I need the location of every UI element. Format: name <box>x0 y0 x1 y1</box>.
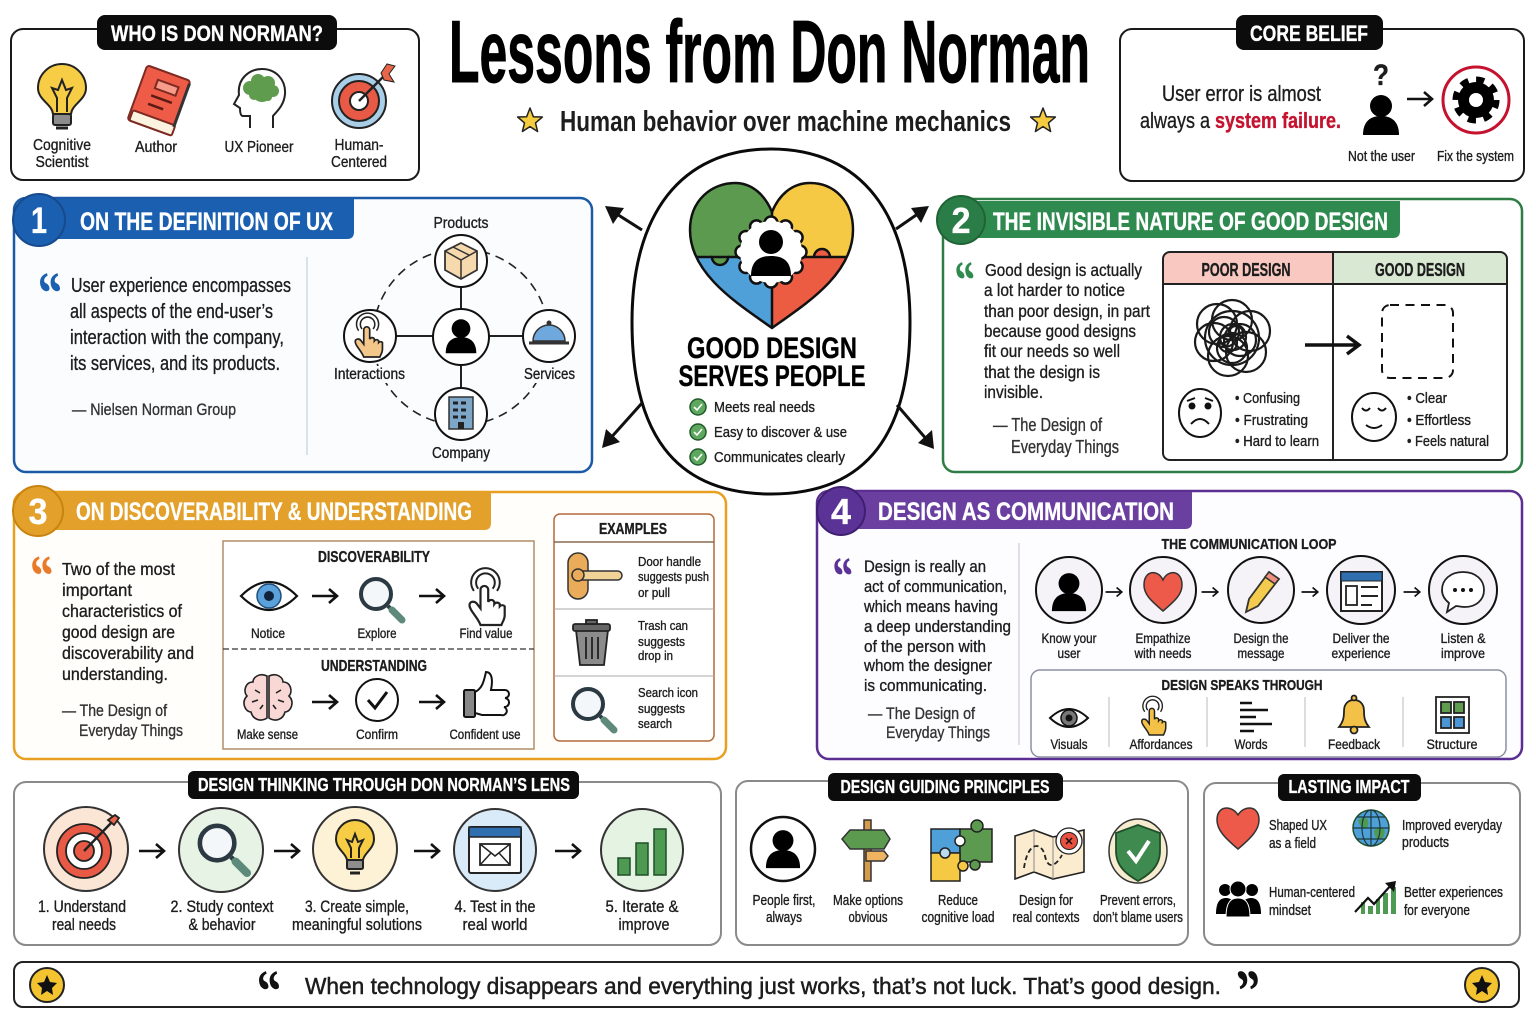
principle: reduce cognitive load: Reduce <box>938 893 978 909</box>
quote text: which means having <box>863 597 998 616</box>
quote text: important <box>62 580 132 600</box>
step: design the message: Design the <box>1234 631 1288 646</box>
impact: better experiences: Better experiences <box>1404 885 1503 901</box>
label: structure: Structure <box>1426 737 1478 752</box>
header: invisible nature: 2 <box>952 200 970 241</box>
step: design the message: message <box>1238 646 1284 661</box>
icon: trash can <box>573 620 610 665</box>
core belief statement: always a system failure. <box>1140 108 1341 133</box>
heading tag: design thinking <box>188 771 579 799</box>
box: design speaks through <box>1031 670 1506 757</box>
examples box <box>554 514 714 741</box>
step: empathize: Empathize <box>1136 631 1190 646</box>
heading: good design serves people: SERVES PEOPLE <box>678 360 866 393</box>
label: visuals: Visuals <box>1050 737 1088 752</box>
label: feedback: Feedback <box>1328 737 1380 752</box>
principle: reduce cognitive load: cognitive load <box>922 910 994 926</box>
step 5: iterate and improve <box>601 809 683 934</box>
header: design as communication: DESIGN AS COMMUNICATION <box>878 498 1174 526</box>
list: poor design traits: • Frustrating <box>1235 413 1308 429</box>
text: search icon <box>638 685 698 731</box>
principle: make options obvious: obvious <box>848 910 888 926</box>
impact: improved products <box>1353 810 1503 851</box>
arrow <box>312 589 337 603</box>
quote text: Two of the most <box>62 559 175 579</box>
heading tag: design guiding principles: DESIGN GUIDING PRINCIPLES <box>840 776 1050 797</box>
impact: better experiences: for everyone <box>1404 903 1470 919</box>
bottom quote bar <box>14 958 1519 1024</box>
principle: prevent errors: Prevent errors, <box>1100 893 1176 909</box>
quote text <box>24 543 194 684</box>
icon: target with arrow <box>332 64 395 128</box>
icon: gear with person <box>736 216 806 288</box>
label: find value: Find value <box>460 626 512 641</box>
quote attribution <box>868 704 990 742</box>
icon: gear in red circle <box>1443 67 1509 133</box>
step: know your user: Know your <box>1042 631 1097 646</box>
checklist <box>690 399 847 466</box>
principle: design for real contexts: Design for <box>1019 893 1073 909</box>
checklist: Communicates clearly <box>714 449 845 466</box>
heading tag: design thinking: DESIGN THINKING THROUGH DON NORMAN’S LENS <box>198 774 570 795</box>
icon: star coin right <box>1465 968 1499 1002</box>
core belief statement <box>1140 81 1341 133</box>
quote text: User experience encompasses <box>71 275 291 297</box>
icon: pointing hand <box>470 568 505 625</box>
text: trash can: drop in <box>638 648 673 663</box>
quote text: than poor design, in part <box>984 301 1150 321</box>
quote text: “ <box>24 543 63 608</box>
panel 1: definition of UX <box>13 194 592 472</box>
principle: make options obvious: Make options <box>833 893 903 909</box>
step: design the message <box>1228 557 1294 661</box>
step: empathize <box>1130 557 1196 661</box>
label: confirm: Confirm <box>356 727 398 742</box>
principle: design for real contexts <box>1012 828 1084 926</box>
quote attribution: Everyday Things <box>1011 437 1119 457</box>
step: know your user: user <box>1058 646 1081 661</box>
label: author: Author <box>135 139 178 156</box>
panel: design guiding principles <box>736 773 1188 945</box>
arrow <box>419 589 444 603</box>
list: poor design traits: • Hard to learn <box>1235 434 1319 450</box>
icon: words lines <box>1240 703 1272 731</box>
node: services <box>523 310 575 362</box>
icon: head with brain <box>234 69 285 128</box>
heading tag: lasting impact <box>1278 774 1421 801</box>
icon: puzzle heart <box>688 182 854 330</box>
heading: discoverability: DISCOVERABILITY <box>318 549 431 566</box>
label: cognitive scientist: Cognitive <box>33 137 91 154</box>
header: design as communication: 4 <box>831 491 851 532</box>
text: door handle: Door handle <box>638 554 701 569</box>
panel: core belief <box>1120 15 1524 181</box>
quote attribution: — The Design of <box>993 415 1103 435</box>
quote text: Design is really an <box>864 557 986 576</box>
arrow <box>1302 587 1318 597</box>
step: deliver the experience: experience <box>1332 646 1390 661</box>
label: not the user: Not the user <box>1348 149 1415 165</box>
impact: human-centered mindset: mindset <box>1269 903 1311 919</box>
text: search icon: Search icon <box>638 685 698 700</box>
step 1: understand real needs: 1. Understand <box>38 898 126 916</box>
step: deliver the experience <box>1327 556 1395 661</box>
text: trash can: Trash can <box>638 618 688 633</box>
label: human-centered: Centered <box>331 154 387 171</box>
quote attribution: Everyday Things <box>79 721 183 740</box>
quote text: “ <box>32 260 72 326</box>
principle: prevent errors: don’t blame users <box>1093 910 1183 926</box>
label: fix the system: Fix the system <box>1437 149 1514 165</box>
icon: sad face <box>1179 389 1221 437</box>
principle: prevent errors <box>1093 819 1183 926</box>
impact: shaped UX: as a field <box>1269 836 1316 852</box>
list: poor design traits: • Confusing <box>1235 391 1300 407</box>
impact: shaped UX <box>1217 808 1327 852</box>
icon: tangled scribble <box>1195 300 1270 376</box>
quote text <box>827 546 1011 695</box>
header: discoverability and understanding <box>13 486 491 536</box>
checklist: Easy to discover & use <box>714 424 847 441</box>
icon: search magnifier <box>573 689 614 730</box>
step 5: iterate and improve: 5. Iterate & <box>606 898 678 916</box>
icon: feedback bell <box>1339 696 1369 734</box>
quote text <box>949 250 1150 402</box>
step: listen and improve <box>1429 556 1497 661</box>
icon: thumbs up <box>464 672 509 717</box>
step 1: understand real needs: real needs <box>52 916 116 934</box>
quote text: because good designs <box>984 321 1136 341</box>
quote text: “ <box>827 546 862 606</box>
step 1: understand real needs <box>38 807 128 934</box>
quote text: its services, and its products. <box>70 353 280 375</box>
icon: visuals eye <box>1050 709 1088 727</box>
step 2: study context <box>170 808 274 934</box>
arrow: to panel 4 <box>897 405 934 449</box>
quote text: discoverability and <box>62 643 194 663</box>
step 3: create simple solutions <box>292 807 422 934</box>
step 2: study context: 2. Study context <box>170 898 274 916</box>
list: poor design traits <box>1235 391 1319 450</box>
center emblem: good design serves people <box>632 149 910 494</box>
impact: improved products: Improved everyday <box>1402 818 1503 834</box>
icon: book <box>127 65 191 136</box>
label: company: Company <box>432 445 490 462</box>
step 4: test in the real world: real world <box>462 916 528 934</box>
label: services: Services <box>524 366 575 383</box>
step: listen and improve: improve <box>1441 646 1485 661</box>
label: words: Words <box>1234 737 1268 752</box>
node: user <box>433 309 489 365</box>
heading tag: lasting impact: LASTING IMPACT <box>1288 776 1410 797</box>
quote attribution: — The Design of <box>868 704 975 723</box>
text: door handle: suggests push <box>638 569 709 584</box>
step: know your user <box>1036 557 1102 661</box>
quote attribution <box>993 415 1119 457</box>
panel 3: discoverability and understanding <box>13 486 726 759</box>
impact: shaped UX: Shaped UX <box>1269 818 1327 834</box>
quote text: characteristics of <box>62 601 182 621</box>
text: trash can: suggests <box>638 634 685 649</box>
heading tag: who is Don Norman: WHO IS DON NORMAN? <box>111 21 323 46</box>
heading tag: design guiding principles <box>828 773 1063 801</box>
panel: who is Don Norman <box>11 15 419 180</box>
quote text: invisible. <box>984 382 1043 402</box>
heading: examples: EXAMPLES <box>599 521 667 538</box>
quote text: fit our needs so well <box>984 341 1120 361</box>
icon: check circle <box>356 679 398 721</box>
arrow <box>555 844 580 858</box>
heading tag: who is Don Norman <box>97 15 337 50</box>
quote attribution: — The Design of <box>62 701 167 720</box>
heading: poor design: POOR DESIGN <box>1202 260 1290 280</box>
heading: good design: GOOD DESIGN <box>1375 260 1465 280</box>
quote text: of the person with <box>864 637 986 656</box>
quote attribution: — Nielsen Norman Group <box>72 400 236 419</box>
principle: people first: People first, <box>752 893 816 909</box>
comparison table: poor vs good design <box>1163 252 1507 460</box>
flow box: discoverability and understanding <box>223 541 534 749</box>
step 5: iterate and improve: improve <box>618 916 670 934</box>
quote attribution <box>62 701 183 740</box>
label: explore: Explore <box>358 626 396 641</box>
panel 4: design as communication <box>817 487 1522 759</box>
list: good design traits <box>1407 391 1489 450</box>
arrow: to panel 2 <box>896 206 929 229</box>
quote text <box>32 260 291 375</box>
core belief statement: User error is almost <box>1162 81 1321 106</box>
quote text: a lot harder to notice <box>984 280 1125 300</box>
icon: confused user <box>1363 59 1399 135</box>
arrow: to panel 3 <box>602 403 642 448</box>
text: search icon: search <box>638 716 672 731</box>
text: door handle: or pull <box>638 585 670 600</box>
label: human-centered <box>331 137 387 171</box>
quote text: interaction with the company, <box>70 327 284 349</box>
step: listen and improve: Listen & <box>1440 631 1486 646</box>
impact: better experiences <box>1355 881 1503 919</box>
arrow <box>1404 587 1420 597</box>
principle: design for real contexts: real contexts <box>1012 910 1080 926</box>
label: notice: Notice <box>251 626 285 641</box>
quote text: a deep understanding <box>864 617 1011 636</box>
arrow <box>139 844 164 858</box>
arrow: to panel 1 <box>605 206 642 230</box>
principle: people first <box>751 817 816 926</box>
text: door handle <box>638 554 709 600</box>
label: products: Products <box>434 215 489 232</box>
header: on the definition of UX: ON THE DEFINITION OF UX <box>80 208 333 236</box>
UX diagram: hub and spokes <box>332 215 577 462</box>
node: products <box>435 235 487 287</box>
icon: door handle <box>568 553 622 599</box>
panel 2: invisible nature of good design <box>937 196 1522 472</box>
step: deliver the experience: Deliver the <box>1332 631 1390 646</box>
heading: good design serves people <box>678 332 866 393</box>
header: design as communication <box>817 487 1192 535</box>
label: human-centered: Human- <box>334 137 384 154</box>
principle: people first: always <box>766 910 802 926</box>
arrow <box>312 695 337 709</box>
header: on the definition of UX: 1 <box>31 200 47 241</box>
panel: lasting impact <box>1204 774 1520 945</box>
label: confident use: Confident use <box>450 727 520 742</box>
label: interactions: Interactions <box>334 366 405 383</box>
impact: improved products: products <box>1402 835 1449 851</box>
heading: understanding: UNDERSTANDING <box>321 658 427 675</box>
quote text: understanding. <box>62 664 168 684</box>
heading tag: core belief: CORE BELIEF <box>1250 21 1368 46</box>
heading: design speaks through: DESIGN SPEAKS THROUGH <box>1162 677 1322 694</box>
list: good design traits: • Feels natural <box>1407 434 1489 450</box>
icon: brain <box>244 675 292 720</box>
quote text: whom the designer <box>863 656 992 675</box>
label: cognitive scientist <box>33 137 91 171</box>
quote text: is communicating. <box>864 676 987 695</box>
header: on the definition of UX <box>13 194 354 246</box>
quote text: act of communication, <box>864 577 1007 596</box>
icon: dashed invisible square <box>1382 305 1453 378</box>
quote text: that the design is <box>984 362 1100 382</box>
step 2: study context: & behavior <box>188 916 256 934</box>
list: good design traits: • Effortless <box>1407 413 1471 429</box>
icon: lightbulb <box>38 64 86 128</box>
icon: happy face <box>1352 393 1396 441</box>
step 4: test in the real world: 4. Test in the <box>454 898 536 916</box>
node: company <box>435 388 487 440</box>
panel: design thinking <box>14 771 721 945</box>
step 4: test in the real world <box>454 809 536 934</box>
checklist: Meets real needs <box>714 399 815 416</box>
arrow <box>419 695 444 709</box>
text: trash can <box>638 618 688 663</box>
icon: structure grid <box>1436 697 1469 733</box>
step 3: create simple solutions: meaningful solutions <box>292 916 422 934</box>
icon: star coin left <box>30 968 64 1002</box>
label: make sense: Make sense <box>237 727 298 742</box>
quote text: all aspects of the end-user’s <box>70 301 273 323</box>
header: discoverability and understanding: 3 <box>28 491 48 532</box>
icon: magnifier <box>361 579 402 620</box>
quote mark open: “ <box>251 958 291 1024</box>
icon: affordances hand <box>1142 696 1166 735</box>
quote text: Good design is actually <box>985 260 1142 280</box>
arrow <box>414 844 439 858</box>
arrow <box>1106 587 1122 597</box>
impact: human-centered mindset: Human-centered <box>1269 885 1355 901</box>
header: discoverability and understanding: ON DISCOVERABILITY & UNDERSTANDING <box>76 498 472 526</box>
node: interactions <box>344 310 396 362</box>
quote mark close: ” <box>1231 958 1271 1024</box>
closing quote text: When technology disappears and everything just works, that’s not luck. That’s good design. <box>305 973 1221 999</box>
impact: human-centered mindset <box>1216 881 1355 919</box>
heading: communication loop: THE COMMUNICATION LOOP <box>1162 536 1336 553</box>
arrow <box>274 844 299 858</box>
step 3: create simple solutions: 3. Create simple, <box>305 898 409 916</box>
arrow <box>1202 587 1218 597</box>
label: cognitive scientist: Scientist <box>36 154 89 171</box>
step: empathize: with needs <box>1134 646 1192 661</box>
icon: eye <box>241 582 297 610</box>
list: good design traits: • Clear <box>1407 391 1447 407</box>
principle: make options obvious <box>833 820 903 926</box>
label: UX pioneer: UX Pioneer <box>224 139 294 156</box>
label: affordances: Affordances <box>1130 737 1193 752</box>
icon: confused user: ? <box>1373 59 1389 92</box>
header: invisible nature <box>937 196 1400 244</box>
text: search icon: suggests <box>638 701 685 716</box>
quote text: “ <box>949 250 984 310</box>
header: invisible nature: THE INVISIBLE NATURE OF GOOD DESIGN <box>993 208 1388 236</box>
heading tag: core belief <box>1236 15 1383 50</box>
quote attribution: Everyday Things <box>886 723 990 742</box>
arrow: poor to good <box>1305 336 1359 354</box>
subtitle with stars: Human behavior over machine mechanics <box>560 106 1011 138</box>
quote text: good design are <box>62 622 175 642</box>
heading: good design serves people: GOOD DESIGN <box>687 332 857 365</box>
principle: reduce cognitive load <box>922 820 994 926</box>
arrow: user to system <box>1407 92 1432 106</box>
